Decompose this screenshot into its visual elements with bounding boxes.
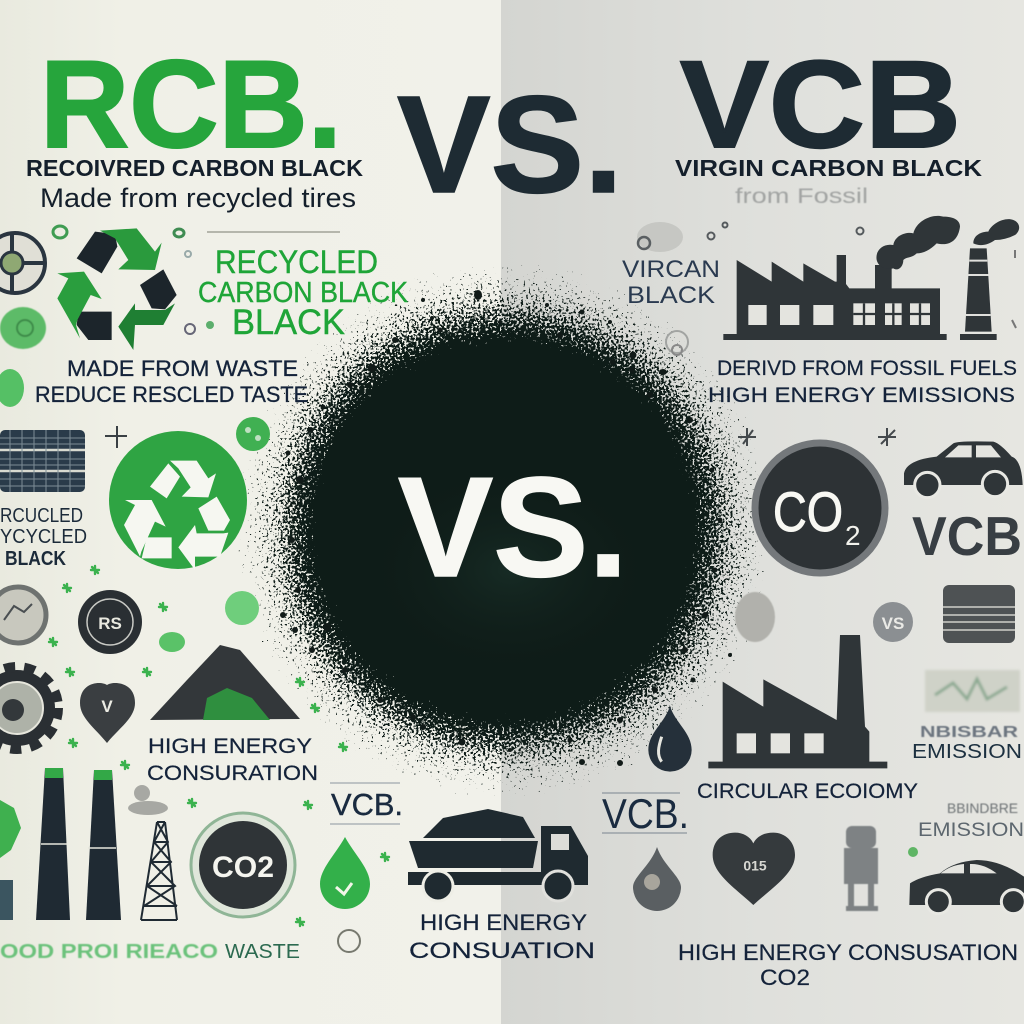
text: recycled carbon black green — [198, 244, 409, 342]
text: emission blurred: EMISSION — [912, 741, 1022, 763]
text: circular economy: CIRCULAR ECOIOMY — [697, 780, 918, 803]
icon: car lower — [909, 860, 1024, 914]
tagline: Made from recycled tires — [40, 183, 356, 213]
panel: RCB header — [26, 36, 363, 213]
text: made from waste: REDUCE RESCLED TASTE — [35, 382, 308, 407]
icon: small drop — [633, 847, 681, 911]
icon: green circle recycling — [109, 431, 247, 570]
text: made from waste: MADE FROM WASTE — [67, 356, 298, 381]
text: high energy consumption left — [147, 735, 318, 785]
faded tagline: from Fossil — [735, 185, 868, 208]
icon: factory top — [723, 216, 960, 340]
blob label VS: VS. — [398, 448, 628, 607]
icon: CO2 badge left — [191, 813, 295, 917]
icon: grey smoke — [128, 785, 168, 815]
text: recycled carbon black green: BLACK — [232, 303, 345, 342]
icon: transmission tower — [141, 822, 177, 920]
text: high energy consumption right: HIGH ENERGY CONSUSATION — [678, 940, 1018, 965]
icon: machinery — [844, 826, 878, 911]
text: recycled carbon black green: CARBON BLACK — [198, 277, 409, 309]
icon: green leaf cluster — [236, 417, 270, 451]
text: recycled black fragment: BLACK — [5, 548, 66, 570]
text: recycled carbon black green: RECYCLED — [215, 244, 378, 280]
label: VCB left: VCB. — [331, 787, 403, 822]
icon: green leaf — [0, 369, 24, 407]
icon: dark heart — [80, 683, 135, 743]
icon: green droplet — [320, 837, 370, 909]
text: green faded waste strip: WASTE — [225, 941, 300, 963]
icon: dark round badge: RS — [98, 614, 122, 633]
icon: oil drop — [648, 706, 692, 772]
subtitle: recovered carbon black: RECOIVRED CARBON BLACK — [26, 155, 363, 181]
icon: CO2 badge left: CO2 — [212, 851, 274, 884]
subtitle: virgin carbon black: VIRGIN CARBON BLACK — [675, 155, 982, 181]
icon: VS small badge: VS — [882, 614, 904, 633]
text: green faded waste strip — [0, 941, 300, 963]
text: virgin black fragment: BLACK — [627, 282, 715, 309]
text: high energy consumption centre: CONSUATION — [409, 938, 595, 963]
icon: dark heart right — [713, 833, 795, 905]
text: virgin black fragment — [622, 256, 720, 309]
icon: dark heart: V — [101, 697, 113, 716]
text: emission blurred — [912, 724, 1022, 763]
label: VCB lower: VCB. — [602, 790, 689, 837]
icon: green small marks — [53, 226, 340, 448]
icon: green circle — [225, 591, 259, 625]
text: recycled black fragment: RCUCLED — [0, 505, 83, 527]
icon: gear top left — [0, 233, 45, 293]
panel: VCB header — [675, 36, 982, 208]
title: RCB: RCB. — [40, 36, 342, 174]
icon: green dot — [908, 847, 918, 857]
text: emission blurred: NBISBAR — [920, 724, 1019, 741]
icon: stacked tires — [943, 585, 1015, 643]
text: virgin black fragment: VIRCAN — [622, 256, 720, 283]
icon: CO2 badge right: 2 — [845, 520, 861, 551]
heading: VS: VS. — [397, 68, 623, 222]
powder particles — [280, 290, 732, 766]
icon: dark heart right: 015 — [743, 858, 767, 874]
icon: CO2 badge right — [755, 443, 885, 573]
icon: recycling symbol green and black — [57, 228, 177, 350]
icon: green sprigs — [49, 566, 389, 926]
text: made from waste — [35, 356, 308, 407]
icon: left edge leaf and stump — [0, 800, 21, 920]
icon: small grey marks — [666, 222, 1016, 446]
icon: CO2 badge right: CO — [773, 480, 843, 543]
icon: grey swirl — [637, 222, 683, 252]
icon: tire tread panel — [0, 430, 85, 492]
left background panel — [0, 0, 501, 1024]
icon: grey rock — [735, 592, 775, 642]
text: emission faded lower: EMISSION — [918, 820, 1024, 841]
icon: truck — [408, 809, 588, 901]
icon: green splat — [159, 632, 185, 652]
icon: chimney right — [960, 219, 1019, 340]
icon: smokestacks — [36, 768, 121, 920]
text: recycled black fragment: YCYCLED — [0, 526, 87, 548]
icon: large gear — [0, 667, 58, 749]
title: VCB: VCB — [680, 36, 961, 174]
central black powder blob — [236, 262, 772, 798]
text: recycled black fragment — [0, 505, 87, 570]
text: emission faded lower — [918, 800, 1024, 841]
text: high energy consumption left: HIGH ENERGY — [148, 735, 312, 758]
icon: car top right — [904, 441, 1023, 498]
icon: dark round badge — [78, 590, 142, 654]
icon: factory lower — [708, 635, 887, 768]
icon: faded green scene — [925, 670, 1020, 712]
icon: grey badge left — [0, 587, 46, 643]
text: derived from fossil fuels — [708, 357, 1017, 407]
icon: green leaf blob — [0, 307, 46, 349]
text: high energy consumption right: CO2 — [760, 965, 810, 990]
text: high energy consumption left: CONSURATION — [147, 762, 318, 785]
icon: mountain pile — [150, 645, 300, 720]
right background panel — [501, 0, 1024, 1024]
text: green faded waste strip: OOD PROI RIEACO — [0, 941, 218, 963]
icon: small sketch face — [338, 930, 360, 952]
text: emission faded lower: BBINDBRE — [947, 800, 1018, 816]
text: high energy consumption centre: HIGH ENERGY — [420, 910, 587, 935]
text: high energy consumption right — [678, 940, 1018, 990]
text: derived from fossil fuels: DERIVD FROM FOSSIL FUELS — [717, 357, 1017, 380]
text: high energy consumption centre — [409, 910, 595, 963]
text: derived from fossil fuels: HIGH ENERGY EMISSIONS — [708, 384, 1015, 407]
icon: VS small badge — [873, 602, 913, 642]
